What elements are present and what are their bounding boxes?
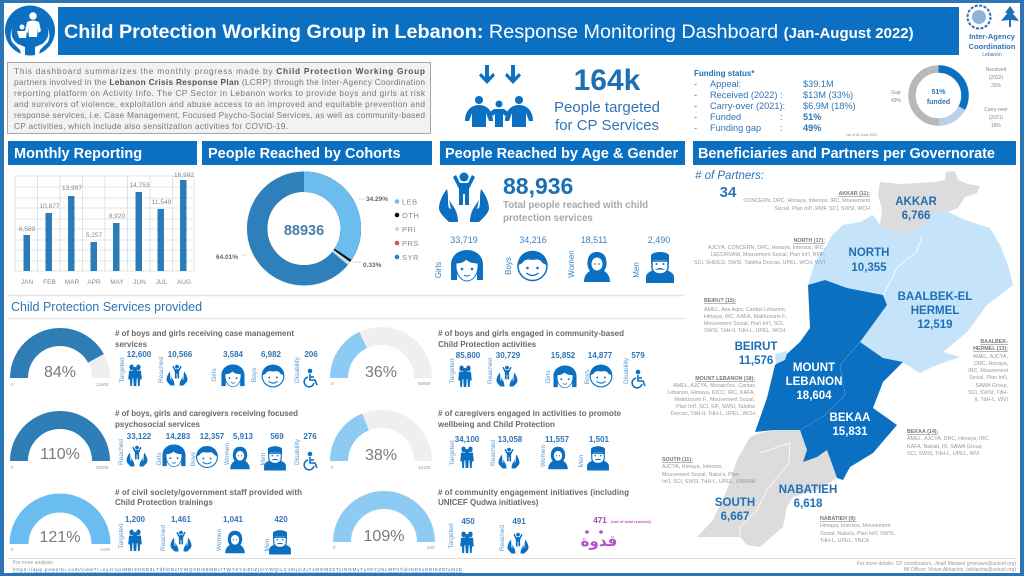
legend: SYR [402,253,419,262]
heading: monthly reporting: Monthly Reporting [14,146,142,162]
number of partners [695,170,764,201]
indicator: trainings: 1,461 [171,515,192,524]
funding status: Funded [710,112,741,122]
gauge: community engagement 109%: 0 [333,545,336,550]
partners: nabatieh: Himaya, Intersos, Mouvement [820,523,891,529]
funding status: 51% [803,112,821,122]
people targeted figure: for CP Services [555,117,659,134]
donut chart: people by cohort [216,182,419,275]
funding status: - [694,112,697,122]
bar chart: monthly reporting: 8,920 [109,213,126,220]
partners: nabatieh [820,516,895,544]
partners: baalbek-hermel: BAALBEK- [980,339,1008,345]
indicator: community engagement: UNICEF Qudwa initiatives) [438,498,539,507]
gauge: trainings 121%: 121% [40,529,80,546]
gauge: focused psychosocial 110% [11,420,109,470]
footer: source link: https://app.powerbi.com/view?r=eyJrIjoiMDI4NGE3LTdhODctYWQ3Ni05MDctTWY0YmZhZjViYWQiLCJ0IjoiZjYxMGM3ZTctNGMyYy00YjI5LWFhYjktNDkxNDI5ZDhjMzE [13,567,462,572]
region: akkar [878,171,980,235]
footer: contact: IM Officer: Vivian Akhachis, (akhachis@unicef.org) [904,567,1016,573]
gauge: community engagement 109%: 450 [427,545,435,550]
indicator: trainings: Women [216,528,223,551]
bar chart: monthly reporting: 6,589 [19,226,36,233]
legend: OTH [402,211,419,220]
region: mount lebanon and bekaa [755,280,903,480]
funding status: Funding status* [694,69,755,78]
map labels: LEBANON [786,376,842,388]
partners: south: Mouvement Social, Naba'a, Plan [662,472,739,478]
indicator: caregivers wellbeing: # of caregivers engaged in activities to promote [438,409,622,418]
indicator: focused psychosocial services: Reached [118,439,125,465]
indicator: case management: Boys [251,367,258,382]
indicator: focused psychosocial services: Women [224,442,231,465]
indicator: community-based activities: Girls [545,370,552,384]
region: south and nabatieh [697,430,837,547]
icon: child protection logo [5,6,55,56]
partners: akkar [743,191,871,212]
heading: people reached by cohorts: People Reached by Cohorts [208,146,401,162]
funding status: : [780,123,783,133]
indicator: case management: 3,584 [223,350,244,359]
partners: bekaa: AMEL, AJCYA, DRC, Himaya, IRC, [907,436,990,442]
indicator: caregivers wellbeing [437,409,622,470]
indicator: community-based activities: 85,800 [456,351,481,360]
number of partners: # of Partners: [695,170,764,182]
partners: beirut: Mouvement Social, Plan Int'l, SCI, [704,321,784,327]
logo: inter-agency coordination: Coordination [969,42,1016,51]
bar chart: monthly reporting: FEB [43,279,56,286]
funding status: $6.9M (18%) [803,101,856,111]
indicator: focused psychosocial services: Girls [156,452,163,466]
funding donut: funded [927,99,950,106]
funding status: Appeal: [710,79,741,89]
heading: people reached by cohorts [202,141,432,165]
gauge: community engagement 109%: 109% [364,528,404,545]
partners: mount lebanon: AMEL, AJCYA, Mosaic/Inc, Caritas [673,383,755,389]
indicator: case management: Targeted [119,357,126,383]
gauge: caregivers 38%: 34100 [418,465,431,470]
gauge: focused psychosocial 110%: 30000 [96,465,109,470]
funding status: $39.1M [803,79,834,89]
funding status: $13M (33%) [803,90,853,100]
gauge: case management 84%: 12600 [96,382,109,387]
partners: baalbek-hermel: IRC, Mouvement [968,368,1009,374]
map labels: 15,831 [832,426,868,438]
indicator: community-based activities: 30,729 [496,351,521,360]
indicator: case management: Reached [158,357,165,383]
callout: qudwa initiatives: (out of total reached) [611,519,651,524]
partners: bekaa: KAFA, Nabad, RI, SAWA Group, [907,444,983,450]
indicator: community-based activities: Reached [487,358,494,384]
gauge: focused psychosocial 110%: 0 [11,465,14,470]
age and gender breakdown: 18,511 [581,235,607,245]
map labels: MOUNT [793,362,835,374]
indicator: trainings: 420 [274,515,288,524]
indicator: community-based activities: 14,877 [588,351,613,360]
partners: baalbek-hermel: SAWA Group, [975,383,1008,389]
partners: beirut: SWSI, TdH-It, TdH-L, UPEL, WCH [704,328,785,334]
title text: Child Protection Working Group in Lebanon: Response Monitoring Dashboard (Jan-August 2022) [64,21,914,43]
people targeted figure: People targeted [554,99,660,116]
indicator: focused psychosocial services: psychosocial services [115,420,200,429]
intro text box: response services, i.e. Case Management, Focused Psycho-Social Services, as well as community-based [14,110,425,120]
map labels: 10,355 [851,262,887,274]
partners: nabatieh: NABATIEH (9): [820,516,857,522]
funding status: - [694,79,697,89]
indicator: focused psychosocial services: Boys [190,451,197,466]
indicator: case management: 12,600 [127,350,152,359]
funding status [694,69,877,137]
age and gender breakdown [434,235,674,283]
gauge: focused psychosocial 110%: 110% [40,446,80,463]
funding donut: Gap [891,90,901,96]
people targeted figure: 164k [574,64,641,97]
footer: source link: For more analysis: [13,560,54,566]
heading: beneficiaries and partners [693,141,1016,165]
partners: baalbek-hermel: It, TdH-L, WVI [975,397,1008,403]
partners: bekaa: SCI, SWSI, TdH-L, UPEL, WVI [907,451,980,457]
icon: people targeted [465,65,533,127]
partners: nabatieh: Social, Naba'a, Plan Int'l, SWSI, [820,531,895,537]
indicator: community-based activities: 579 [631,351,645,360]
partners: mount lebanon: Makhzoumi F., Mouvement Social, [674,397,755,403]
partners: bekaa: BEKAA (14): [907,429,939,435]
intro text box: partners involved in the Lebanon Crisis Response Plan (LCRP) through the Inter-Agency Coordination [14,77,425,87]
partners: beirut: BEIRUT (15): [704,298,737,304]
partners: akkar: Social, Plan Int'l, RMF, SCI, SWSI, WCH [775,206,870,212]
indicator: community-based activities: Disability [623,357,630,384]
total people reached [503,173,648,224]
funding status: - [694,123,697,133]
partners: baalbek-hermel: Social, Plan Int'l, [969,375,1008,381]
legend [395,198,419,262]
indicator: case management [115,329,318,387]
gauge: caregivers 38% [331,419,431,470]
logo: inter-agency coordination: Inter-Agency [969,32,1016,41]
legend: PRS [402,239,419,248]
total people reached: 88,936 [503,173,573,199]
partners: south [662,457,756,485]
indicator: trainings: 1,041 [223,515,244,524]
total people reached: protection services [503,213,593,224]
bar chart: monthly reporting: 5,257 [86,232,103,239]
callout: qudwa initiatives: 471 [593,516,607,525]
age and gender breakdown: Women [567,250,576,278]
map labels: BAALBEK-EL [898,291,972,303]
indicator: caregivers wellbeing: Men [578,454,585,467]
bar chart: monthly reporting: MAY [110,279,124,286]
age and gender breakdown: Girls [434,262,443,278]
indicator: caregivers wellbeing: 1,501 [589,435,610,444]
funding status: : [780,112,783,122]
funding donut: Received [986,67,1007,73]
partners: bekaa [907,429,990,457]
indicator: focused psychosocial services: 12,357 [200,432,225,441]
indicator: focused psychosocial services: Men [260,452,267,465]
bar chart: monthly reporting: JUL [156,279,168,286]
indicator: case management: 206 [304,350,318,359]
funding donut: 18% [991,123,1002,129]
map labels: 12,519 [917,319,953,331]
indicator: case management: Disability [294,356,301,383]
total people reached: Total people reached with child [503,200,648,211]
indicator: trainings: Men [264,538,271,551]
footer: contact: For more details: CP coordinators, Jinad Morawo (jmorawo@unicef.org) [857,561,1016,567]
bar chart: monthly reporting: APR [87,279,101,286]
indicator: caregivers wellbeing: Reached [490,440,497,466]
partners: beirut: AMEL, Ana Aqra, Caritas Lebanon, [704,307,786,313]
heading: monthly reporting [8,141,197,165]
indicator: caregivers wellbeing: Targeted [449,440,456,466]
map labels [715,196,972,523]
intro text box: reporting platform on Activity Info. The CP Sector in Lebanon works to provide boys and girls at risk [14,88,426,98]
map labels: BEKAA [830,412,870,424]
funding status: Received (2022) : [710,90,783,100]
gauge: caregivers 38%: 38% [365,447,397,464]
age and gender breakdown: 2,490 [648,235,670,245]
indicator: trainings: Targeted [118,523,125,549]
legend: PRI [402,225,416,234]
partners: nabatieh: TdH-L, UPEL, YNCA [820,538,870,544]
indicator: trainings: 1,200 [125,515,146,524]
indicator: focused psychosocial services: # of boys, girls and caregivers receiving focused [115,409,298,418]
bar chart: monthly reporting [15,172,194,286]
legend: LEB [402,198,418,206]
indicator: community engagement: 450 [461,517,475,526]
map labels: AKKAR [895,196,937,208]
partners: south: AJCYA, Himaya, Intersos, [662,464,723,470]
funding status: *as of 30 June 2022 [846,133,877,137]
indicator: community engagement [438,488,629,554]
intro text box: CP activities, which include also sensitization activities for COVID-19. [14,121,288,131]
gauge: case management 84%: 0 [11,382,14,387]
gauge: community-based 36%: 36% [365,364,397,381]
logo: inter-agency coordination [968,6,1019,58]
bar chart: monthly reporting: 16,992 [174,172,194,179]
bar chart: monthly reporting: JAN [21,279,33,286]
map labels: HERMEL [911,305,959,317]
indicator: caregivers wellbeing: 34,100 [455,435,480,444]
indicator: focused psychosocial services: 569 [270,432,284,441]
indicator: case management: # of boys and girls receiving case management [115,329,294,338]
footer: contact [857,561,1016,573]
donut chart: people by cohort: 64.01% [216,254,238,261]
map labels: 11,576 [739,355,773,367]
indicator: community-based activities [438,329,645,388]
funding donut: 49% [891,98,902,104]
age and gender breakdown: Men [632,262,641,278]
map of Lebanon governorates [697,171,1013,547]
indicator: community-based activities: # of boys and girls engaged in community-based [438,329,624,338]
indicator: case management: services [115,340,148,349]
indicator: community-based activities: Boys [584,369,591,384]
intro text box: This dashboard summarizes the monthly progress made by Child Protection Working Group [14,66,425,76]
partners: south: Int'l, SCI, SWSI, TdH-L, UPEL, UNRWA [662,479,756,485]
partners: mount lebanon: Plan Int'l, SCI, SIF, SWSI, Tabitha [676,404,755,410]
funding donut: (2022) [989,75,1004,81]
indicator: community engagement: Targeted [448,523,455,549]
indicator: trainings: Reached [160,525,167,551]
age and gender breakdown: Boys [504,257,513,275]
map labels: 6,667 [721,511,749,523]
indicator: trainings: # of civil society/government staff provided with [115,488,302,497]
partners: north: LECORVAW, Mouvement Social, Plan Int'l, RMF, [711,252,825,258]
region: north and baalbek-hermel [808,210,1013,373]
indicator: caregivers wellbeing: Women [540,444,547,467]
partners: beirut [704,298,788,334]
intro text box: and survivors of violence, exploitation and abuse access to an improved and equitable prevention and [14,99,425,109]
icon: hands holding child [439,172,489,222]
donut chart: people by cohort: 0.33% [363,262,382,269]
funding status: 49% [803,123,821,133]
funding status: Carry-over (2021): [710,101,785,111]
bar chart: monthly reporting: MAR [65,279,80,286]
callout: qudwa initiatives [581,516,651,550]
indicator: caregivers wellbeing: 11,557 [545,435,570,444]
partners: north: NORTH (17): [794,238,825,244]
indicator: caregivers wellbeing: 13,058 [498,435,523,444]
donut chart: people by cohort: 88936 [284,223,324,239]
gauge: community-based 36%: 0 [331,381,334,386]
heading: child protection services provided: Child Protection Services provided [11,300,202,314]
bar chart: monthly reporting: 11,549 [152,199,172,206]
funding donut: 33% [991,83,1002,89]
partners: akkar: AKKAR (11): [838,191,870,197]
map labels: BEIRUT [735,341,777,353]
map labels: NORTH [849,247,889,259]
funding donut: 51% [931,89,946,96]
map labels: NABATIEH [779,484,837,496]
bar chart: monthly reporting: 13,997 [62,185,82,192]
funding donut: Carry-over [984,107,1008,113]
heading: people reached by age and gender [440,141,685,165]
number of partners: 34 [720,184,737,201]
partners: mount lebanon: Lebanon, Himaya, IOCC, IRC, KAFA, [667,390,755,396]
map labels: 18,604 [796,390,832,402]
map labels: 6,618 [794,498,823,510]
callout: qudwa initiatives: قدوة [581,532,617,550]
indicator: case management: 6,982 [261,350,282,359]
funding status: - [694,101,697,111]
gauge: community-based 36%: 85800 [418,381,431,386]
heading: beneficiaries and partners: Beneficiaries and Partners per Governorate [698,146,995,162]
partners: baalbek-hermel: SCI, SWSI, TdH- [968,390,1008,396]
funding status: Funding gap [710,123,761,133]
partners: north: AJCYA, CONCERN, DRC, Himaya, Intersos, IRC, [708,245,825,251]
footer: source link [13,560,462,572]
partners: north: SCI, SHEILD, SWSI, Tabitha Dorcas, UPEL, WCH, WVI [694,260,825,266]
bar chart: monthly reporting: 14,753 [130,182,150,189]
indicator: community engagement: 491 [512,517,526,526]
logo: inter-agency coordination: Lebanon [982,52,1002,58]
indicator: focused psychosocial services: 5,913 [233,432,254,441]
indicator: community-based activities: 15,852 [551,351,576,360]
partners: mount lebanon: Dorcas, TdH-It, TdH-L, UPEL, WCH [671,411,755,417]
partners: baalbek-hermel: AMEL, AJCYA, [973,354,1008,360]
heading: people reached by age and gender: People Reached by Age & Gender [445,146,678,162]
donut chart: people by cohort: 34.29% [366,196,388,203]
partners: baalbek-hermel: HERMEL (13): [973,346,1008,352]
indicator: community-based activities: Child Protection activities [438,340,537,349]
indicator: community engagement: # of community engagement initiatives (including [438,488,629,497]
gauge: case management 84%: 84% [44,364,76,381]
region: beirut [775,351,788,364]
gauge: trainings 121% [11,503,111,552]
indicator: caregivers wellbeing: wellbeing and Child Protection [437,420,555,429]
gauge: community engagement 109% [333,500,435,550]
partners: north [694,238,825,266]
intro text box [8,62,430,134]
indicator: trainings [115,488,302,554]
gauge: case management 84% [11,337,109,387]
partners: beirut: Himaya, IRC, KAFA, Makhzoumi F., [704,314,788,320]
indicator: case management: Girls [211,368,218,382]
indicator: case management: 10,566 [168,350,193,359]
gauge: community-based 36% [331,336,431,386]
partners: south: SOUTH (11): [662,457,693,463]
partners: baalbek-hermel: DRC, Himaya, [974,361,1008,367]
gauge: trainings 121%: 1200 [100,547,111,552]
funding donut [891,67,1008,129]
age and gender breakdown: 34,216 [519,235,547,245]
people targeted figure [554,64,660,134]
map labels: 6,766 [902,210,930,222]
indicator: focused psychosocial services [115,409,317,470]
indicator: community-based activities: Targeted [449,358,456,384]
partners: akkar: CONCERN, DRC, Himaya, Intersos, IRC, Mouvement [743,198,871,204]
map labels: SOUTH [715,497,755,509]
bar chart: monthly reporting: AUG [177,279,191,286]
indicator: community engagement: Reached [499,525,506,551]
indicator: focused psychosocial services: 276 [303,432,317,441]
funding donut: (2021) [989,115,1004,121]
title banner [58,7,959,55]
age and gender breakdown: 33,719 [450,235,478,245]
funding status: - [694,90,697,100]
indicator: focused psychosocial services: Disability [294,438,301,465]
indicator: trainings: Child Protection trainings [115,498,213,507]
partners: mount lebanon [667,376,755,417]
gauge: trainings 121%: 0 [11,547,14,552]
partners: mount lebanon: MOUNT LEBANON (18): [695,376,755,382]
bar chart: monthly reporting: 10,877 [40,203,60,210]
partners: baalbek-hermel [968,339,1009,403]
indicator: focused psychosocial services: 33,122 [127,432,152,441]
gauge: caregivers 38%: 0 [331,465,334,470]
bar chart: monthly reporting: JUN [133,279,146,286]
indicator: focused psychosocial services: 14,283 [166,432,191,441]
